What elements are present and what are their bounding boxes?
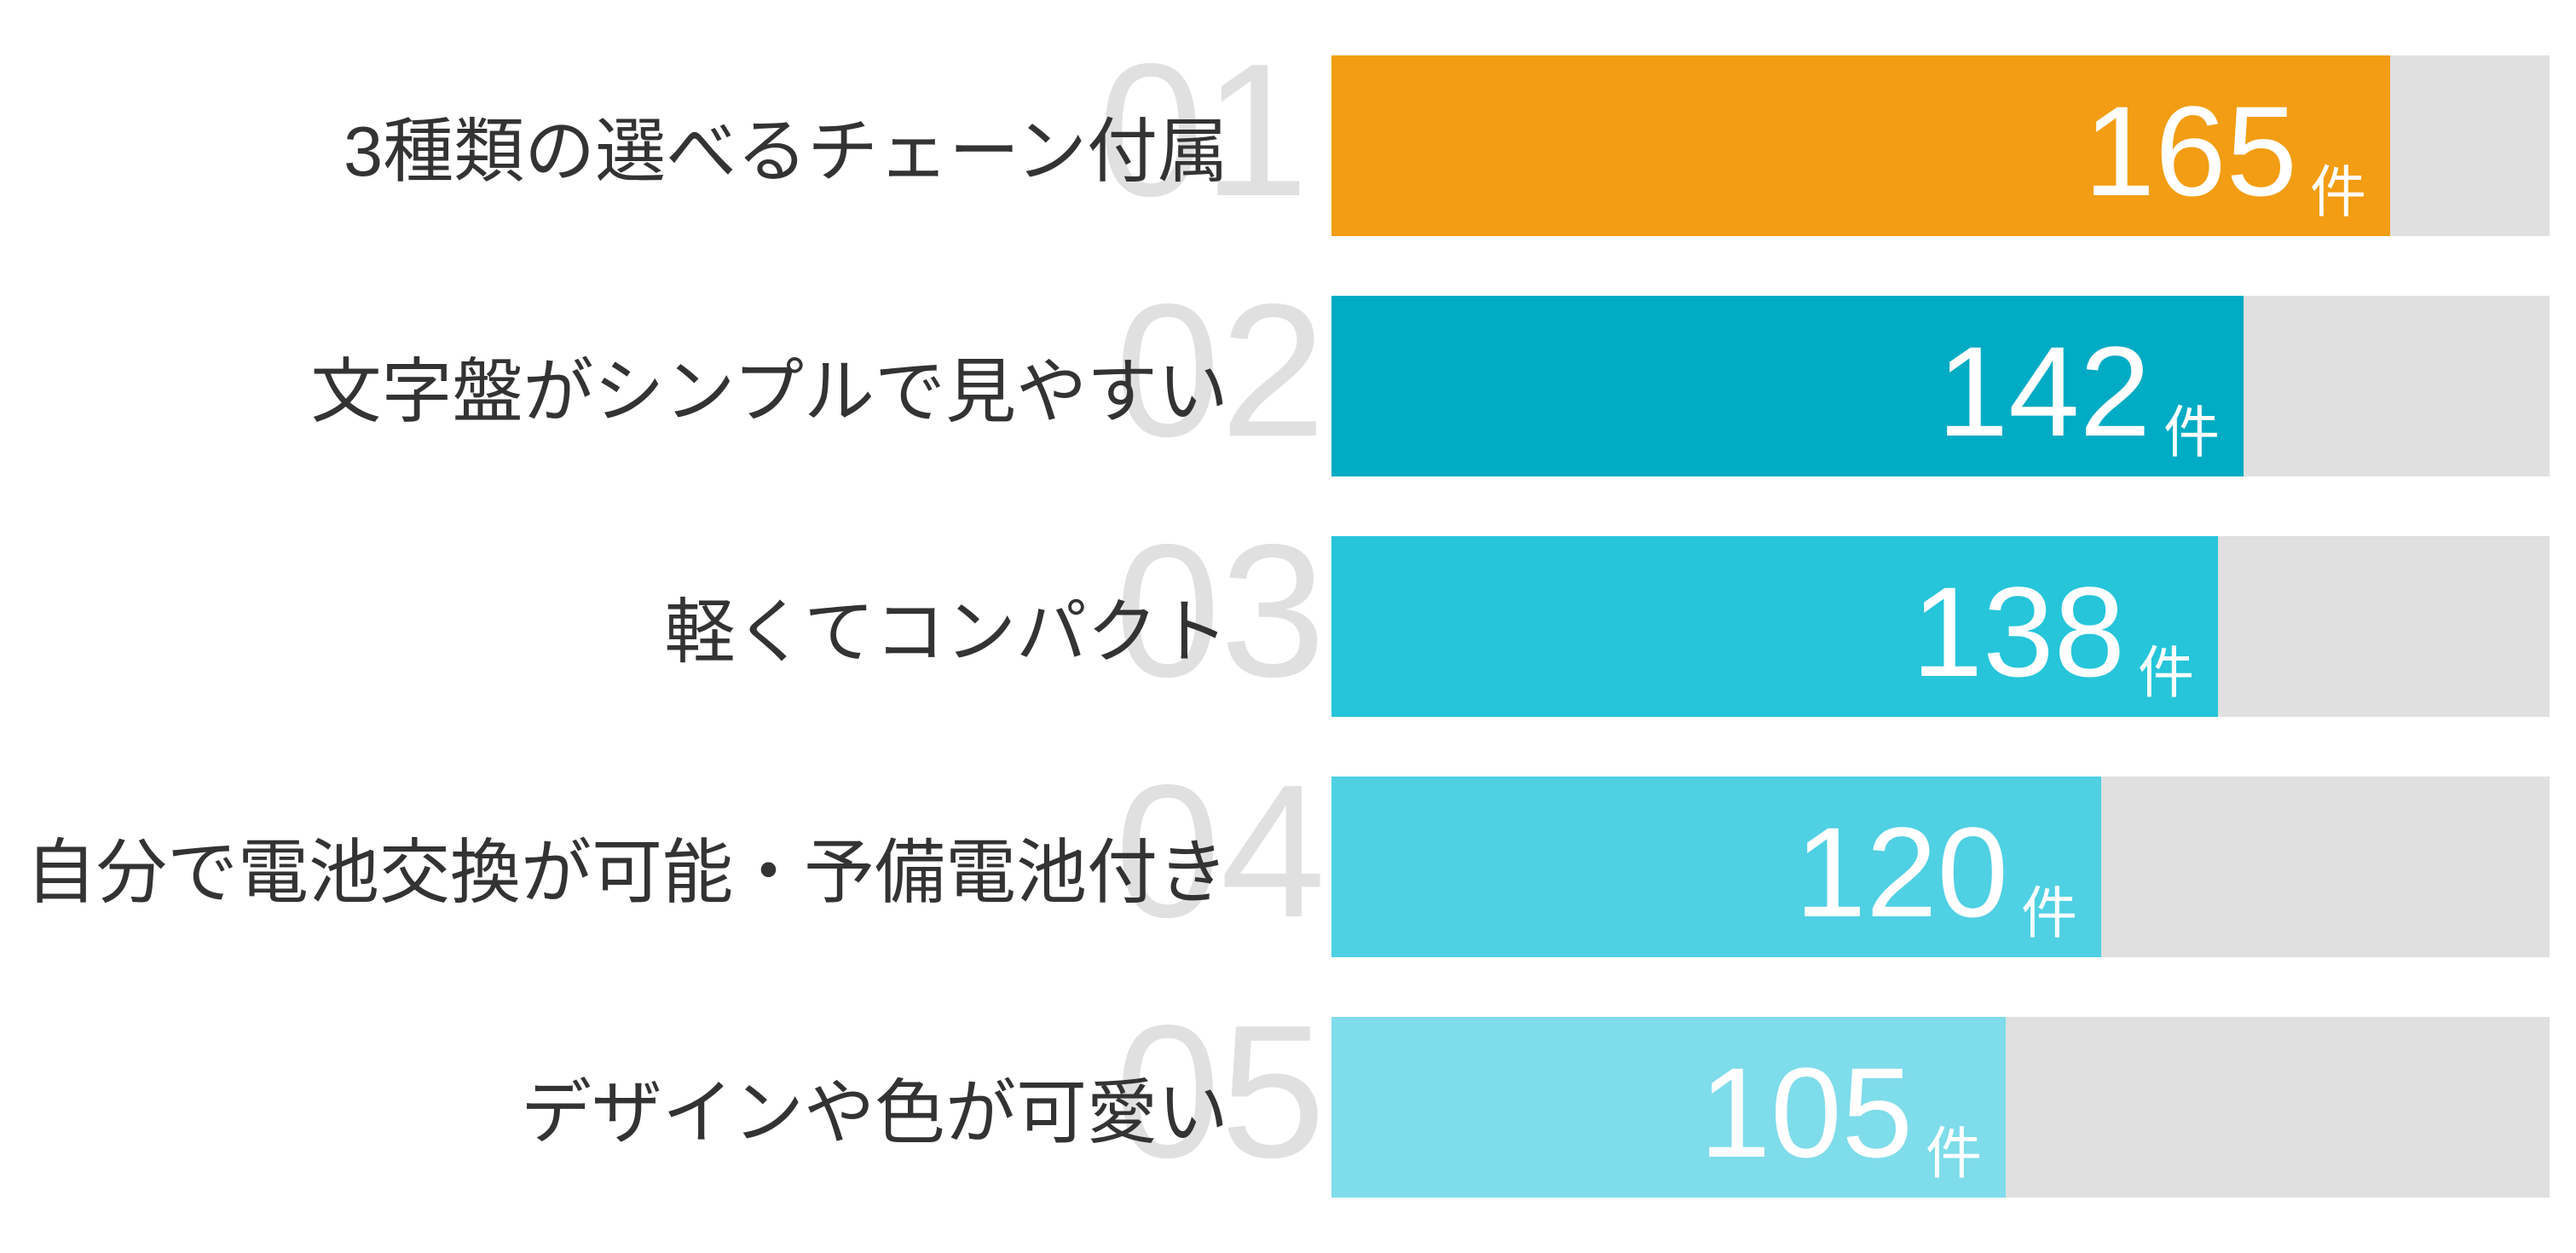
row 4: [26, 746, 2550, 957]
label: 自分で電池交換が可能・予備電池付き: [26, 833, 1228, 912]
bar: [1331, 536, 2218, 717]
track: [1331, 777, 2550, 957]
unit: 件: [2021, 881, 2077, 944]
label: デザインや色が可愛い: [521, 1073, 1228, 1152]
ghost number 01: 01: [1098, 25, 1308, 236]
unit: 件: [2163, 401, 2220, 464]
label: 文字盤がシンプルで見やすい: [310, 352, 1228, 431]
bar: [1331, 1017, 2006, 1198]
value: 165: [2084, 79, 2297, 222]
ghost number 05: 05: [1115, 986, 1326, 1198]
value: 105: [1700, 1041, 1913, 1184]
track: [1331, 296, 2550, 476]
row 2: [310, 265, 2550, 476]
row 1: [344, 25, 2550, 236]
track: [1331, 1017, 2550, 1198]
bar: [1331, 55, 2390, 236]
unit: 件: [2138, 641, 2194, 704]
track: [1331, 55, 2550, 236]
value: 120: [1795, 800, 2008, 944]
value: 142: [1938, 320, 2151, 463]
row 3: [664, 505, 2550, 717]
label: 3種類の選べるチェーン付属: [344, 112, 1228, 191]
unit: 件: [1926, 1122, 1982, 1185]
label: 軽くてコンパクト: [664, 592, 1228, 672]
ghost number 04: 04: [1115, 746, 1326, 957]
bar: [1331, 777, 2101, 957]
value: 138: [1912, 560, 2125, 703]
track: [1331, 536, 2550, 717]
row 5: [521, 986, 2550, 1198]
unit: 件: [2310, 160, 2366, 223]
ghost number 03: 03: [1115, 505, 1326, 717]
bar: [1331, 296, 2244, 476]
ghost number 02: 02: [1115, 265, 1326, 476]
